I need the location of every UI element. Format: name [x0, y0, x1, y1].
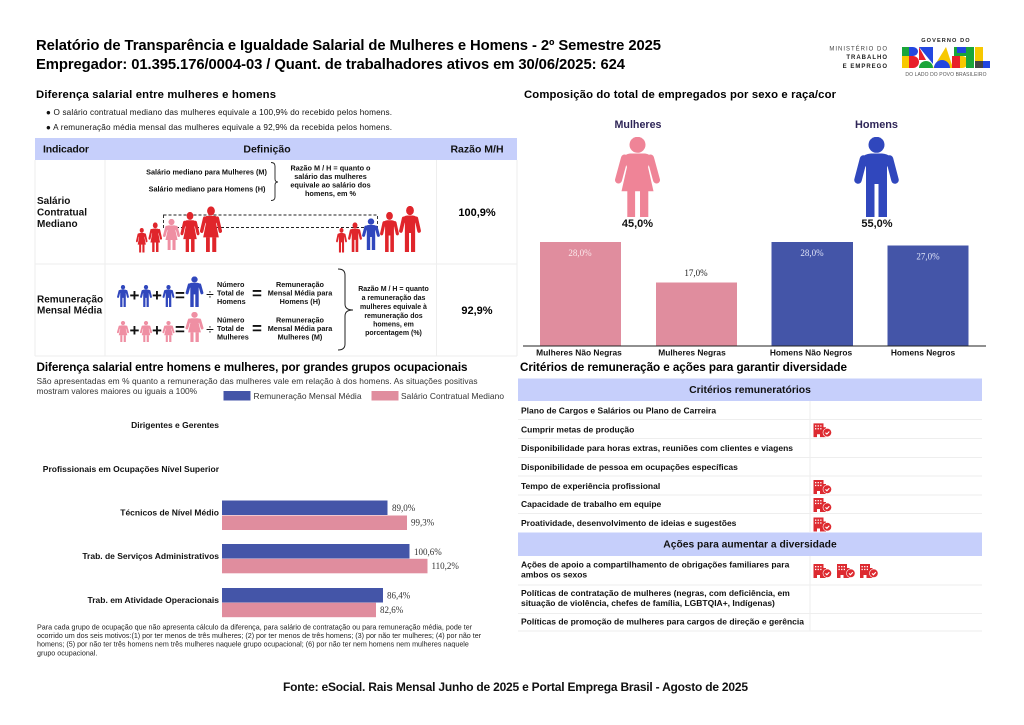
bar values: 28,0%	[568, 248, 592, 258]
title: Relatório de Transparência e Igualdade Salarial de Mulheres e Homens - 2º Semestre 2025	[36, 38, 661, 54]
icons: critérios adotados	[814, 423, 832, 532]
source footer: Fonte: eSocial. Rais Mensal Junho de 2025 e Portal Emprega Brasil - Agosto de 2025	[283, 680, 748, 694]
table header	[43, 144, 504, 156]
row label: salário contratual mediano: Mediano	[37, 219, 78, 230]
criteria list: Capacidade de trabalho em equipe	[521, 499, 662, 509]
text block: explicação	[36, 376, 478, 396]
row definition: salário mediano: equivale ao salário dos	[290, 180, 371, 190]
logo: Ministério do Trabalho e Emprego: E EMPREGO	[843, 64, 888, 70]
figure: mulheres: Mulheres	[615, 119, 662, 131]
bar labels: Mulheres Não Negras	[536, 348, 622, 358]
category labels: Técnicos de Nível Médio	[120, 508, 219, 518]
bar values	[380, 503, 459, 615]
formula: homens: =	[252, 284, 262, 303]
bar values: 110,2%	[432, 561, 459, 571]
row label: remuneração: Remuneração	[37, 294, 103, 306]
logo: Ministério do Trabalho e Emprego: TRABALHO	[846, 55, 888, 61]
row label: remuneração	[37, 294, 103, 316]
panel: tabela de indicadores	[35, 138, 517, 356]
actions list: ambos os sexos	[521, 570, 587, 580]
formula: mulheres: Total de	[217, 324, 244, 333]
bar labels: Mulheres Negras	[658, 348, 726, 358]
figure: homens: 55,0%	[861, 218, 893, 230]
brace: remuneração	[338, 269, 353, 350]
formula: homens: +	[130, 286, 140, 305]
figure: homens: Homens	[855, 119, 898, 131]
logo: Governo do Brasil: GOVERNO DO	[921, 38, 971, 44]
row definition: salário mediano: homens, em %	[305, 189, 357, 198]
row definition: razão remuneração	[358, 286, 429, 337]
category labels: Trab. em Atividade Operacionais	[88, 595, 219, 605]
formula: mulheres: Mensal Média para	[268, 324, 333, 333]
footnote: Para cada grupo de ocupação que não apresenta cálculo da diferença, para salário de contratação ou para remuneração média, pode ter	[37, 624, 473, 632]
table title: Ações para aumentar a diversidade	[663, 540, 837, 550]
legend	[224, 391, 504, 401]
formula: homens: ÷	[206, 286, 214, 302]
legend: Salário Contratual Mediano	[401, 391, 504, 401]
row label: remuneração: Mensal Média	[37, 306, 102, 316]
formula: mulheres: ÷	[206, 321, 214, 337]
actions list	[521, 560, 804, 626]
criteria list: Cumprir metas de produção	[521, 424, 634, 434]
criteria list: Disponibilidade de pessoa em ocupações específicas	[521, 462, 738, 472]
formula: homens: Remuneração	[276, 280, 325, 289]
row definition: razão remuneração: porcentagem (%)	[365, 330, 422, 337]
heading: Diferença salarial: Diferença salarial entre mulheres e homens	[36, 89, 276, 101]
actions list: Políticas de promoção de mulheres para cargos de direção e gerência	[521, 616, 804, 626]
text block: explicação: São apresentadas em % quanto a remuneração das mulheres vale em relação à dos homens. As situações positivas	[36, 376, 478, 386]
row definition: salário mediano	[146, 164, 371, 198]
table title: Critérios remuneratórios	[689, 385, 811, 396]
category labels: Dirigentes e Gerentes	[131, 420, 219, 430]
bar values: 17,0%	[684, 268, 708, 278]
actions list: Políticas de contratação de mulheres (negras, com deficiência, em	[521, 588, 790, 598]
formula: mulheres: =	[175, 320, 185, 339]
criteria list: Disponibilidade para horas extras, reuniões com clientes e viagens	[521, 443, 793, 453]
row definition: salário mediano: Salário mediano para Homens (H)	[149, 184, 266, 194]
bar values	[568, 248, 940, 278]
bar values: 28,0%	[800, 248, 824, 258]
row definition: salário mediano: salário das mulheres	[294, 172, 367, 181]
formula: mulheres: Número	[217, 316, 245, 324]
footnote	[37, 624, 482, 658]
bar values: 27,0%	[916, 252, 940, 262]
text block: resumo	[46, 108, 392, 132]
bar labels: Homens Negros	[891, 348, 955, 358]
row definition: razão remuneração: mulheres equivale à	[360, 304, 427, 311]
figure: mulheres: 45,0%	[622, 218, 653, 230]
brace: salário mediano	[271, 162, 278, 200]
formula: mulheres: +	[152, 321, 162, 340]
formula: mulheres: Mulheres	[217, 332, 249, 342]
row definition: razão remuneração: Razão M / H = quanto	[358, 286, 429, 293]
formula: homens: Total de	[217, 288, 244, 298]
actions list: situação de violência, chefes de família, LGBTQIA+, Indígenas)	[521, 598, 775, 608]
formula: mulheres: Remuneração	[276, 316, 325, 324]
panel: critérios remuneratórios	[518, 378, 982, 532]
bar chart: composição por raça/cor	[523, 242, 986, 358]
text block: resumo: ● A remuneração média mensal das mulheres equivale a 92,9% da recebida pelos homens.	[46, 123, 392, 132]
figure: homens	[855, 119, 898, 230]
formula: homens: Número	[217, 280, 245, 289]
heading: composição: Composição do total de empregados por sexo e raça/cor	[524, 89, 837, 101]
bar values: 89,0%	[392, 503, 416, 513]
footnote: homens; (5) por não ter três homens nem três mulheres naquele grupo ocupacional; (6) por não ter nem homens nem mulheres naquele	[37, 640, 469, 648]
logo: Ministério do Trabalho e Emprego: MINISTÉRIO DO	[829, 46, 888, 52]
category labels: Profissionais em Ocupações Nível Superior	[43, 464, 220, 474]
table header: Indicador	[43, 144, 89, 156]
criteria list: Plano de Cargos e Salários ou Plano de Carreira	[521, 406, 716, 416]
heading: grupos ocupacionais: Diferença salarial entre homens e mulheres, por grandes grupos ocupacionais	[36, 361, 468, 374]
title: Empregador: 01.395.176/0004-03 / Quant. de trabalhadores ativos em 30/06/2025: 624	[36, 57, 626, 73]
row label: salário contratual mediano	[37, 196, 87, 230]
bar values: 100,6%	[414, 547, 442, 557]
criteria list: Proatividade, desenvolvimento de ideias e sugestões	[521, 518, 737, 528]
row definition: razão remuneração: homens, em	[373, 322, 414, 328]
actions list: Ações de apoio a compartilhamento de obrigações familiares para	[521, 560, 790, 570]
row label: salário contratual mediano: Salário	[37, 196, 70, 207]
category labels	[43, 420, 220, 605]
formula: homens: Homens (H)	[280, 297, 321, 306]
text block: explicação: mostram valores maiores ou iguais a 100%	[36, 386, 198, 396]
formula: homens: Homens	[217, 297, 246, 306]
formula: homens: Mensal Média para	[268, 288, 333, 298]
row definition: razão remuneração: remuneração dos	[364, 313, 423, 320]
icons: ações adotadas	[814, 564, 878, 578]
logo: Governo do Brasil: DO LADO DO POVO BRASILEIRO	[905, 72, 987, 78]
formula: mulheres: =	[252, 319, 262, 338]
criteria list: Tempo de experiência profissional	[521, 481, 660, 491]
legend: Remuneração Mensal Média	[254, 391, 362, 401]
icon: men row	[337, 206, 419, 252]
dashed guides	[164, 215, 378, 228]
formula: homens	[118, 276, 333, 307]
row definition: salário mediano: Razão M / H = quanto o	[290, 164, 371, 172]
bar labels	[536, 348, 955, 358]
row label: salário contratual mediano: Contratual	[37, 208, 87, 218]
bars	[222, 500, 428, 617]
bar values: 86,4%	[387, 590, 411, 600]
bar labels: Homens Não Negros	[770, 348, 853, 358]
heading: critérios: Critérios de remuneração e ações para garantir diversidade	[520, 361, 847, 374]
formula: mulheres	[118, 312, 333, 342]
panel: ações para diversidade	[518, 532, 982, 631]
title	[36, 38, 661, 73]
bar chart: grupos ocupacionais	[43, 420, 459, 617]
table header: Razão M/H	[450, 144, 504, 156]
value: salário: 100,9%	[458, 207, 496, 219]
footnote: ocorrido um dos seis motivos:(1) por ter menos de três mulheres; (2) por ter menos de três homens; (3) por não ter mulheres; (4) por não ter	[37, 632, 482, 640]
row definition: razão remuneração: a remuneração das	[362, 295, 426, 302]
icon: women row	[137, 206, 220, 252]
criteria list	[521, 406, 793, 528]
table header: Definição	[243, 144, 291, 156]
logo: Governo do Brasil	[902, 38, 990, 78]
value: remuneração: 92,9%	[461, 305, 493, 317]
bar values: 82,6%	[380, 605, 404, 615]
category labels: Trab. de Serviços Administrativos	[82, 551, 219, 561]
row definition: salário mediano: Salário mediano para Mulheres (M)	[146, 168, 267, 176]
footnote: grupo ocupacional.	[37, 650, 97, 658]
figure: mulheres	[615, 119, 662, 230]
formula: mulheres: +	[130, 321, 140, 340]
formula: mulheres: Mulheres (M)	[278, 332, 323, 342]
formula: homens: =	[175, 286, 185, 305]
text block: resumo: ● O salário contratual mediano das mulheres equivale a 100,9% do recebido pelos homens.	[46, 108, 392, 117]
logo: Ministério do Trabalho e Emprego	[829, 46, 888, 70]
formula: homens: +	[152, 286, 162, 305]
bar values: 99,3%	[411, 518, 435, 528]
